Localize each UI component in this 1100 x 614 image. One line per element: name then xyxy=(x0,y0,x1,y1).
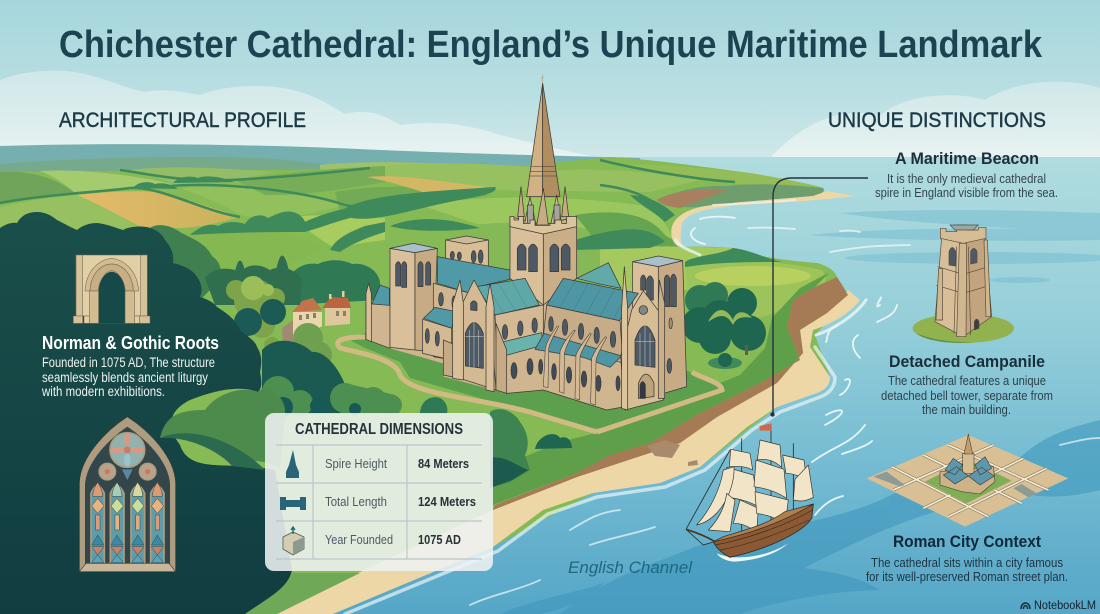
text block: norman and gothic roots: seamlessly blends ancient liturgy xyxy=(42,370,208,385)
nave left wall xyxy=(433,283,470,363)
forest: canopy above table xyxy=(262,341,352,414)
trees right of cathedral xyxy=(682,282,766,369)
sea xyxy=(0,157,1100,614)
base silhouette xyxy=(366,283,687,410)
clouds xyxy=(0,71,1100,158)
distant hills xyxy=(0,144,640,180)
panel: cathedral dimensions: Total Length xyxy=(325,494,387,509)
central tower xyxy=(510,217,543,305)
text block: detached campanile xyxy=(881,352,1053,417)
flying buttresses xyxy=(543,326,607,405)
arch icon xyxy=(73,255,150,323)
surf foam xyxy=(345,200,1100,614)
text block: detached campanile: Detached Campanile xyxy=(889,352,1045,371)
sea swirl shading xyxy=(808,210,1100,283)
heading: architectural profile: ARCHITECTURAL PROFILE xyxy=(59,109,306,132)
text block: a maritime beacon xyxy=(875,149,1058,200)
right tower xyxy=(633,262,658,390)
icon: ship xyxy=(686,423,813,562)
text block: roman city context: Roman City Context xyxy=(893,532,1041,551)
hedgerows xyxy=(0,160,735,217)
text block: norman and gothic roots: Founded in 1075 AD, The structure xyxy=(42,355,215,370)
forest: dark mass xyxy=(0,212,292,614)
spire pinnacles xyxy=(518,187,569,225)
text block: roman city context xyxy=(866,532,1068,584)
tower battlements xyxy=(510,217,577,234)
panel: cathedral dimensions: 124 Meters xyxy=(418,494,476,509)
text block: a maritime beacon: spire in England visible from the sea. xyxy=(875,186,1058,200)
sky xyxy=(0,0,1100,170)
path around cathedral xyxy=(338,337,722,432)
houses xyxy=(282,291,351,345)
icon: roman city street plan xyxy=(867,434,1068,527)
icon: length xyxy=(280,497,306,510)
right rear transept roof xyxy=(577,263,621,288)
text block: roman city context: The cathedral sits within a city famous xyxy=(871,556,1063,570)
heading: unique distinctions: UNIQUE DISTINCTIONS xyxy=(828,109,1046,132)
stained glass window icon xyxy=(79,417,176,572)
lower aisle wall xyxy=(497,337,625,410)
label: english channel: English Channel xyxy=(568,558,693,577)
panel: cathedral dimensions: CATHEDRAL DIMENSIONS xyxy=(295,421,463,438)
text block: a maritime beacon: A Maritime Beacon xyxy=(895,149,1039,168)
text block: norman and gothic roots: with modern exhibitions. xyxy=(41,384,165,399)
panel: cathedral dimensions: 84 Meters xyxy=(418,456,469,471)
tree row behind houses xyxy=(288,260,380,305)
lower aisle roofs xyxy=(497,333,543,356)
left west tower xyxy=(390,248,415,350)
watermark: notebooklm: NotebookLM xyxy=(1034,600,1096,612)
forest: right of table xyxy=(490,409,530,488)
main roofs xyxy=(477,278,539,315)
text block: roman city context: for its well-preserved Roman street plan. xyxy=(866,570,1068,584)
land xyxy=(0,157,850,614)
cypress trees xyxy=(234,256,290,276)
rear nave roof xyxy=(437,257,510,293)
panel: cathedral dimensions: 1075 AD xyxy=(418,532,461,547)
spire xyxy=(527,83,543,197)
rear tower xyxy=(446,240,488,270)
text block: detached campanile: the main building. xyxy=(922,403,1011,417)
centre walls xyxy=(495,305,543,347)
cathedral xyxy=(366,75,687,410)
panel: cathedral dimensions xyxy=(265,413,493,571)
text block: norman and gothic roots xyxy=(41,333,219,399)
panel: cathedral dimensions: Spire Height xyxy=(325,456,387,471)
forest: green bush left of table xyxy=(160,388,285,470)
west front gable xyxy=(621,291,663,410)
grass strip below table xyxy=(245,573,360,614)
fields xyxy=(0,163,830,505)
grass around cathedral xyxy=(346,300,722,430)
left far chapel xyxy=(366,303,390,348)
beach xyxy=(277,290,860,614)
text block: norman and gothic roots: Norman & Gothic Roots xyxy=(42,333,219,353)
icon: campanile tower xyxy=(913,225,1014,343)
text block: detached campanile: The cathedral features a unique xyxy=(888,374,1046,388)
icon: spire xyxy=(286,450,299,478)
callout line: beacon to ship xyxy=(770,178,868,417)
left transept gable xyxy=(460,280,496,390)
brown cliffs xyxy=(493,277,848,510)
icon: foundation stone xyxy=(283,527,304,555)
text block: a maritime beacon: It is the only medieval cathedral xyxy=(887,172,1046,186)
coastal dark grass band xyxy=(493,272,830,505)
tower windows xyxy=(517,244,570,272)
forest: mid-green trees xyxy=(145,225,221,300)
panel: cathedral dimensions: Year Founded xyxy=(325,532,393,547)
text block: detached campanile: detached bell tower, separate from xyxy=(881,389,1053,403)
